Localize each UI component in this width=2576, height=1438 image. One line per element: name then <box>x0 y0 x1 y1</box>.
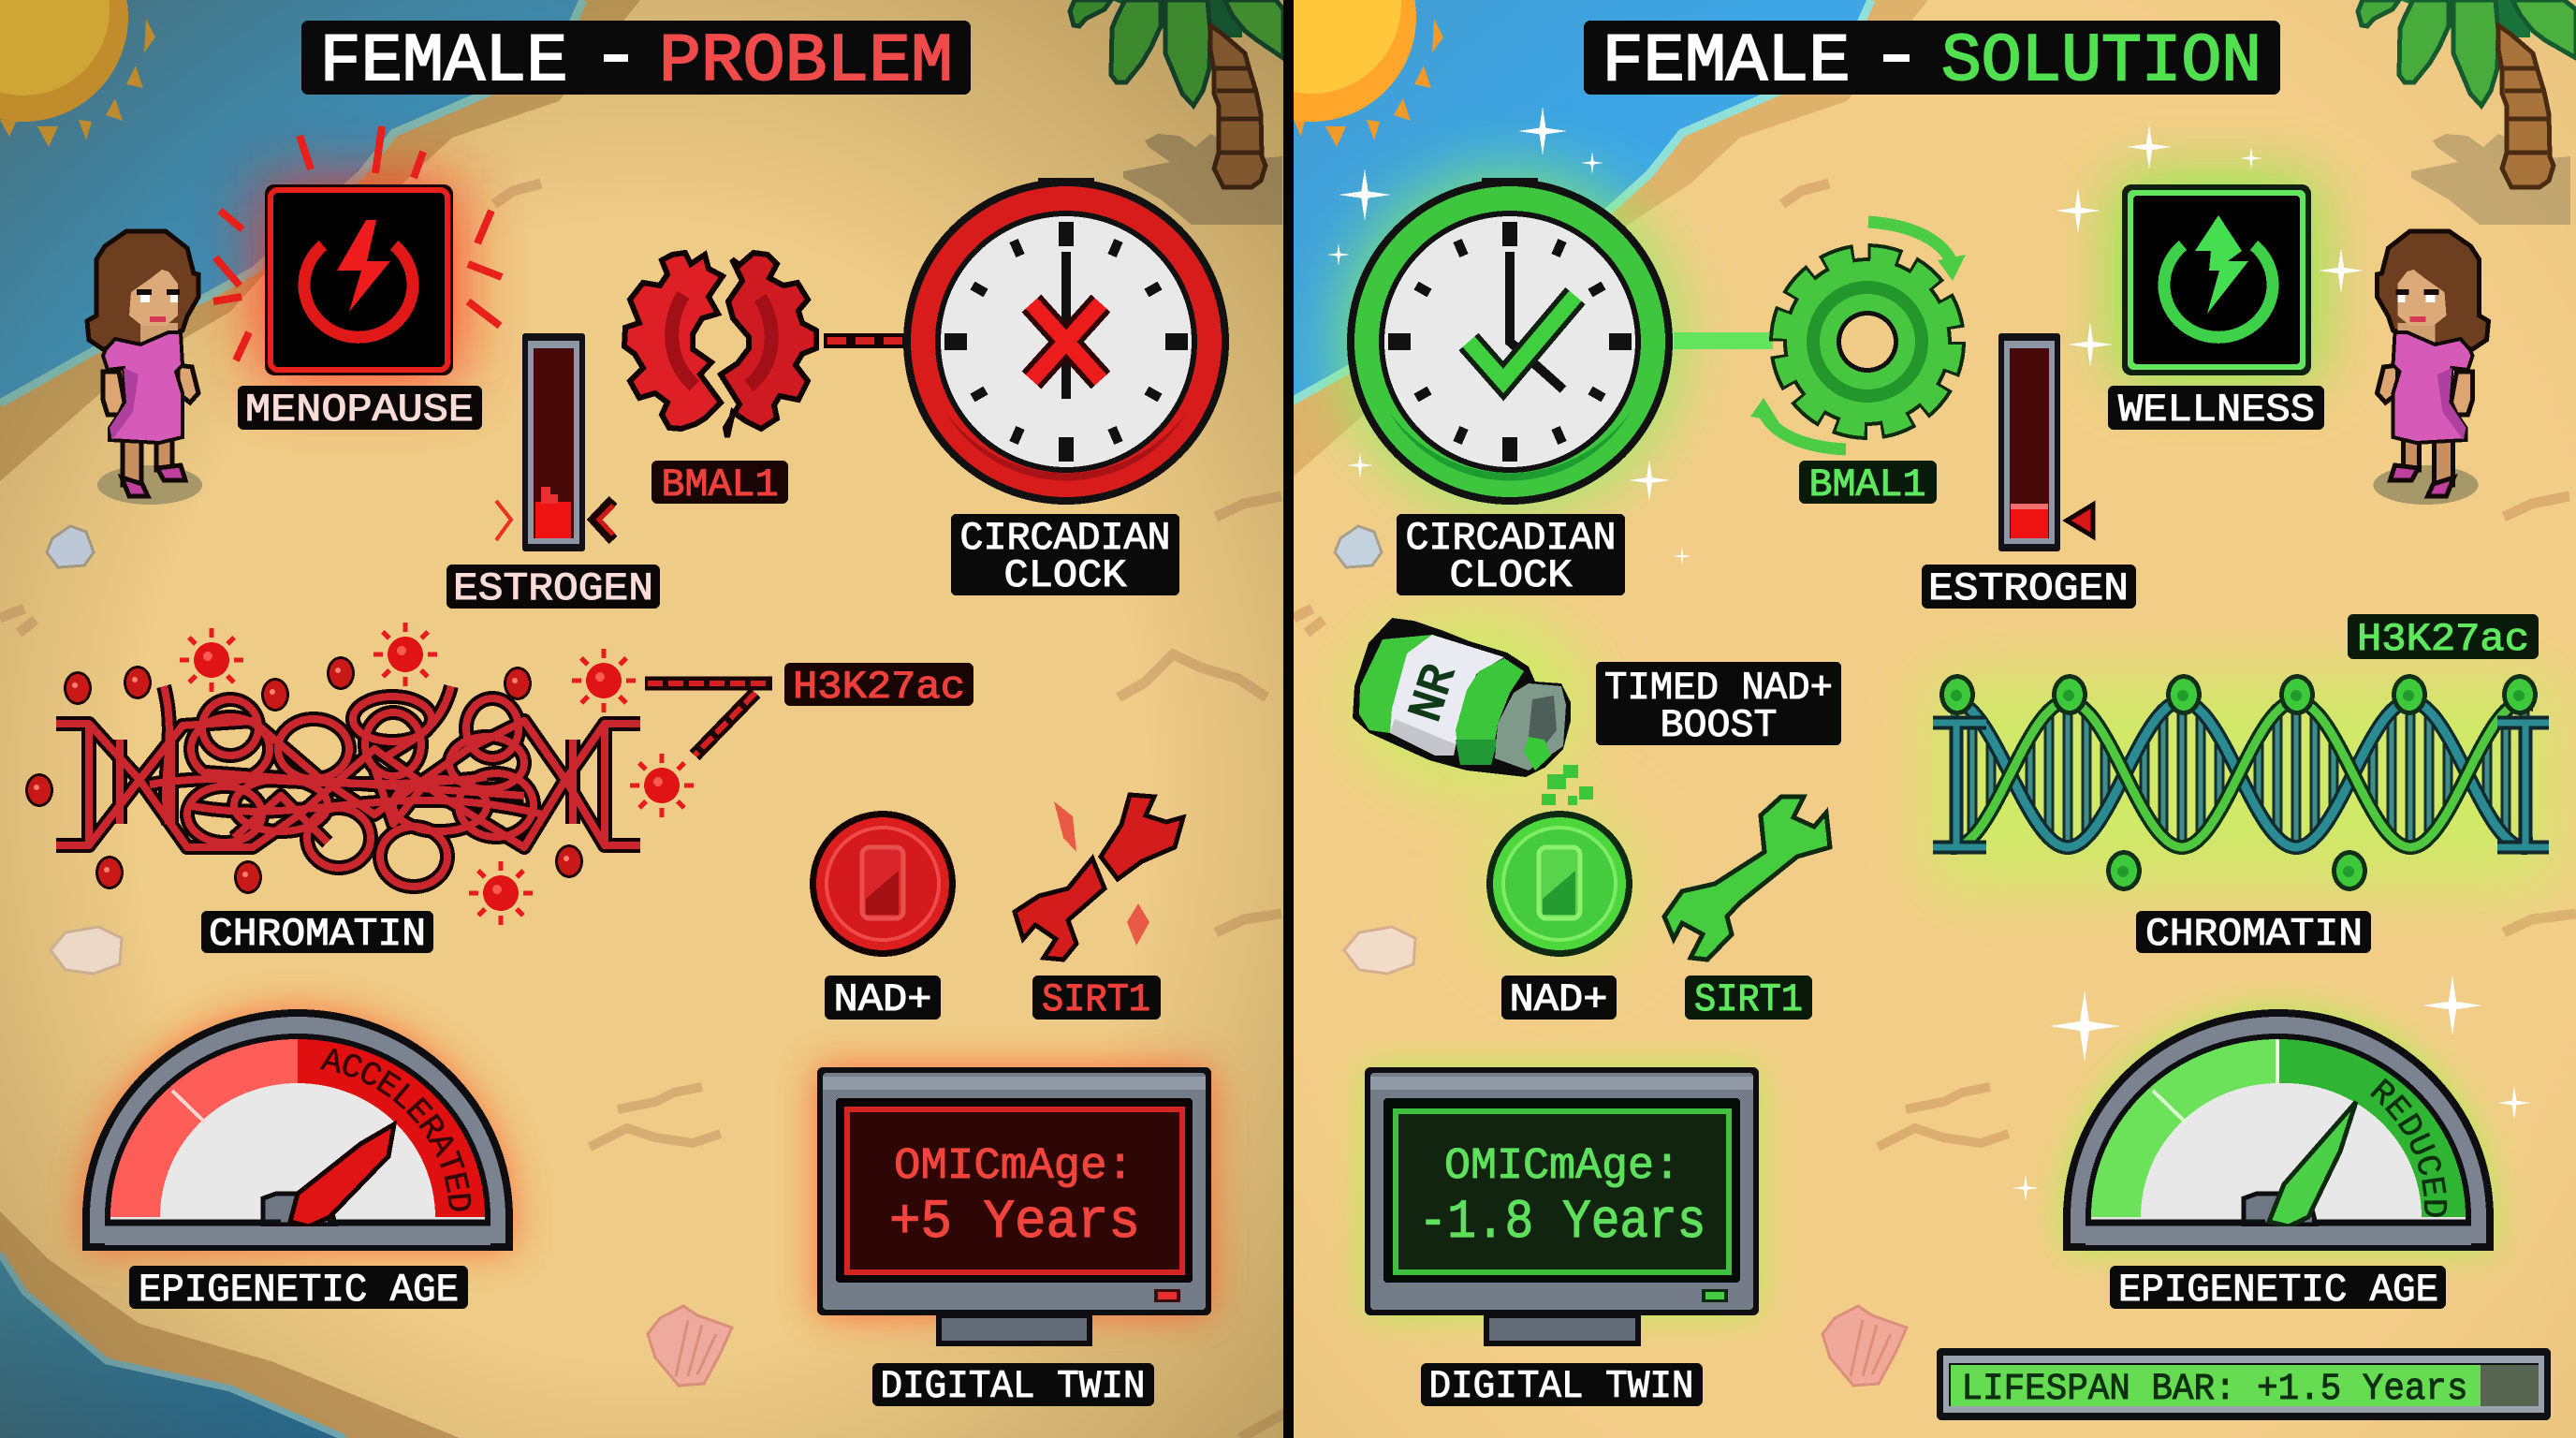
chart: restored chromatin helix <box>1839 674 2576 891</box>
chart: tangled chromatin <box>25 623 694 925</box>
icon: NR supplement bottle: NR <box>1400 658 1469 728</box>
icon: NAD+ coin <box>1486 811 1632 957</box>
icon: healthy circadian clock <box>1347 178 1673 505</box>
title: female problem: FEMALE <box>320 23 567 100</box>
icon: woman <box>2374 231 2488 505</box>
icon: SIRT1 wrench <box>1664 797 1830 960</box>
lifespan bar <box>1937 1348 2551 1420</box>
panel: female solution <box>1294 0 2576 1438</box>
readout: OMICmAge +5: OMICmAge: <box>894 1142 1134 1192</box>
glows <box>1341 173 2555 1315</box>
icon: palm tree <box>2358 0 2576 187</box>
label: SIRT1: SIRT1 <box>1042 977 1150 1022</box>
title: female problem <box>301 21 971 100</box>
label: timed NAD+ boost <box>1596 662 1841 748</box>
icon: accelerated gauge <box>62 986 535 1275</box>
icon: dim sun <box>0 0 155 147</box>
icon: failing circadian clock <box>903 178 1229 505</box>
label: circadian clock: CIRCADIAN <box>1406 516 1616 561</box>
icon: broken BMAL1 gear <box>624 253 816 437</box>
icon: woman <box>87 231 202 505</box>
label: circadian clock: CLOCK <box>1003 553 1127 598</box>
label: timed NAD+ boost: BOOST <box>1661 703 1777 748</box>
label: estrogen: ESTROGEN <box>453 566 653 611</box>
label: timed NAD+ boost: TIMED NAD+ <box>1604 666 1833 711</box>
icon: menopause power warning <box>213 126 502 381</box>
icon: BMAL1 gear <box>1750 222 1966 449</box>
connector: broken link to H3K27ac <box>645 683 772 756</box>
background: beach <box>0 0 1287 1438</box>
icon: accelerated gauge: ACCELERATED <box>320 1049 472 1211</box>
readout: OMICmAge +5: +5 Years <box>889 1193 1140 1254</box>
icon: NAD+ coin <box>810 811 956 957</box>
label: digital twin: DIGITAL TWIN <box>1428 1364 1694 1409</box>
shells and pebbles <box>1335 526 1907 1386</box>
connector: broken dashes <box>824 333 903 348</box>
label: BMAL1: BMAL1 <box>661 462 779 507</box>
label: estrogen: ESTROGEN <box>1928 566 2129 611</box>
label: epigenetic age: EPIGENETIC AGE <box>139 1268 459 1313</box>
title: female solution: SOLUTION <box>1941 23 2261 100</box>
connector: solid link <box>1674 332 1773 349</box>
icon: reduced gauge <box>2063 1009 2494 1251</box>
tangle <box>56 686 640 887</box>
label: circadian clock: CLOCK <box>1449 553 1573 598</box>
label: BMAL1: BMAL1 <box>1808 462 1926 507</box>
icon: broken SIRT1 wrench <box>1015 795 1183 960</box>
label: circadian clock <box>951 514 1179 598</box>
label: chromatin: CHROMATIN <box>2145 912 2363 957</box>
background: beach <box>1288 0 2576 1438</box>
icon: wellness power <box>2122 184 2311 375</box>
label: wellness: WELLNESS <box>2118 388 2315 433</box>
lifespan bar: LIFESPAN BAR: +1.5 Years <box>1962 1369 2467 1411</box>
readout: OMICmAge -1.8 <box>1419 1142 1705 1254</box>
icon: digital twin monitor <box>1365 1067 1759 1346</box>
icon: NR supplement bottle <box>1353 618 1593 805</box>
title: female problem: PROBLEM <box>659 23 953 100</box>
icon: reduced gauge: REDUCED <box>2370 1078 2447 1217</box>
panel: female problem <box>0 0 1283 1438</box>
label: chromatin: CHROMATIN <box>209 912 426 957</box>
histone marks <box>25 623 694 925</box>
label: digital twin: DIGITAL TWIN <box>880 1364 1146 1409</box>
icon: estrogen gauge <box>1998 333 2093 551</box>
label: NAD+: NAD+ <box>833 977 932 1022</box>
label: SIRT1: SIRT1 <box>1694 977 1803 1022</box>
label: circadian clock: CIRCADIAN <box>960 516 1170 561</box>
readout: OMICmAge -1.8: -1.8 Years <box>1419 1193 1705 1254</box>
label: menopause: MENOPAUSE <box>245 388 474 433</box>
label: H3K27ac: H3K27ac <box>793 665 965 710</box>
label: H3K27ac: H3K27ac <box>2357 617 2529 662</box>
label: circadian clock <box>1397 514 1625 598</box>
readout: OMICmAge +5 <box>889 1142 1140 1254</box>
label: NAD+: NAD+ <box>1509 977 1608 1022</box>
title: female solution: FEMALE <box>1603 23 1850 100</box>
icon: digital twin monitor <box>817 1067 1211 1346</box>
readout: OMICmAge -1.8: OMICmAge: <box>1444 1142 1680 1192</box>
divider <box>1283 0 1294 1438</box>
icon: estrogen low gauge <box>496 333 613 551</box>
label: epigenetic age: EPIGENETIC AGE <box>2118 1268 2438 1313</box>
icon: palm tree <box>1070 0 1283 187</box>
title: female solution <box>1584 21 2280 100</box>
icon: sun <box>1207 0 1443 147</box>
shells and pebbles <box>47 526 732 1386</box>
sparkles <box>1327 107 2531 1201</box>
